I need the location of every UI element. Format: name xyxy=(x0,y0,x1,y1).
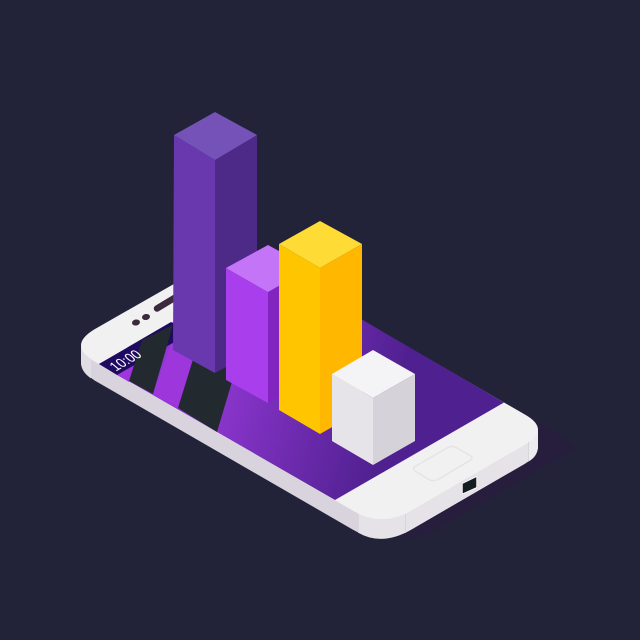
screen xyxy=(99,266,504,500)
purple stripe small xyxy=(117,366,134,382)
dark stripe one xyxy=(129,325,173,394)
phone side right corner xyxy=(528,429,538,462)
corner seam lines xyxy=(358,442,528,533)
screen background xyxy=(99,266,504,500)
phone side lower right xyxy=(358,429,538,539)
bar: yellow xyxy=(279,221,362,434)
purple stripe middle xyxy=(153,340,199,408)
home button xyxy=(414,446,472,481)
speaker slot xyxy=(157,297,176,308)
phone xyxy=(81,248,538,539)
dark stripe two xyxy=(178,340,240,432)
phone top surface xyxy=(81,248,538,519)
clock text: 10:00 xyxy=(106,348,146,374)
front camera dots xyxy=(132,313,150,326)
charging port xyxy=(462,476,477,494)
phone side left corner xyxy=(81,346,91,378)
status bar xyxy=(99,322,190,375)
bar: white xyxy=(332,350,415,465)
phone side edge xyxy=(81,346,538,538)
phone drop shadow xyxy=(380,420,574,538)
bar: lilac xyxy=(226,245,310,403)
bar: tall purple xyxy=(173,112,257,373)
